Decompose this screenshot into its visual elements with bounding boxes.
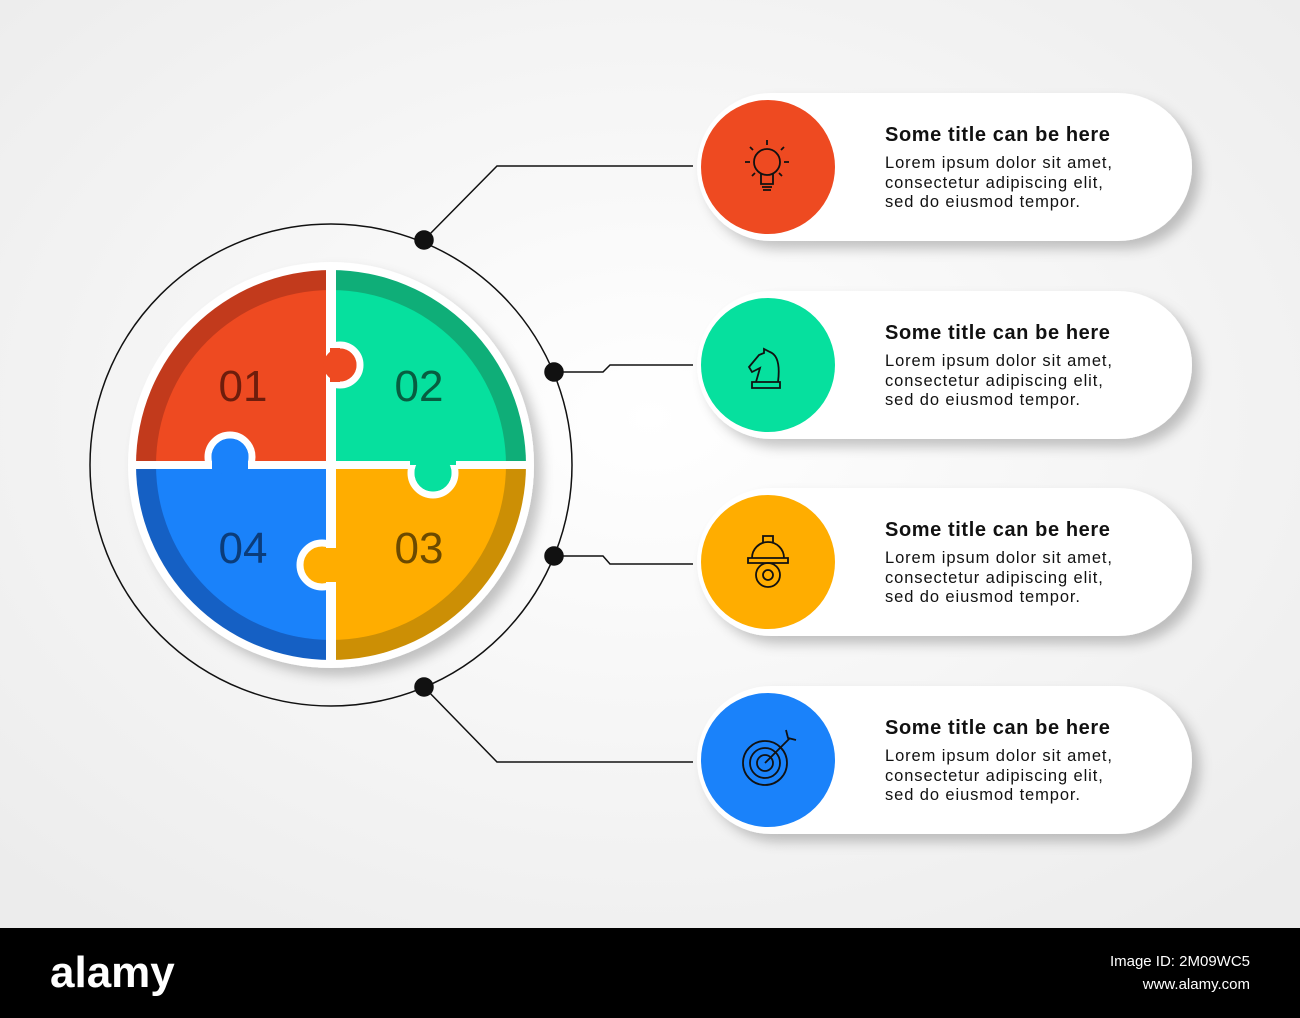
card 3: consectetur adipiscing elit,	[885, 569, 1104, 587]
card 2: sed do eiusmod tempor.	[885, 391, 1081, 409]
card 1: sed do eiusmod tempor.	[885, 193, 1081, 211]
card 2: consectetur adipiscing elit,	[885, 372, 1104, 390]
footer bar: Image ID: 2M09WC5	[1110, 953, 1250, 970]
puzzle circle: 04	[219, 524, 267, 573]
card 4	[697, 686, 1192, 834]
footer bar: alamy	[50, 948, 175, 997]
puzzle circle: 02	[395, 362, 443, 411]
card 1	[697, 93, 1192, 241]
card 1: Some title can be here	[885, 124, 1110, 146]
card 3	[697, 488, 1192, 636]
connectors	[415, 166, 693, 762]
card 2: Some title can be here	[885, 322, 1110, 344]
card 4: sed do eiusmod tempor.	[885, 786, 1081, 804]
footer bar	[0, 928, 1300, 1018]
card 3: Lorem ipsum dolor sit amet,	[885, 549, 1113, 567]
footer bar: www.alamy.com	[1142, 976, 1250, 993]
card 1: Lorem ipsum dolor sit amet,	[885, 154, 1113, 172]
card 1: consectetur adipiscing elit,	[885, 174, 1104, 192]
outer ring	[90, 224, 572, 706]
card 4: consectetur adipiscing elit,	[885, 767, 1104, 785]
card 2	[697, 291, 1192, 439]
card 4: Lorem ipsum dolor sit amet,	[885, 747, 1113, 765]
puzzle circle: 01	[219, 362, 267, 411]
card 3: sed do eiusmod tempor.	[885, 588, 1081, 606]
puzzle circle: 03	[395, 524, 443, 573]
card 3: Some title can be here	[885, 519, 1110, 541]
card 2: Lorem ipsum dolor sit amet,	[885, 352, 1113, 370]
puzzle circle	[128, 262, 534, 668]
card 4: Some title can be here	[885, 717, 1110, 739]
